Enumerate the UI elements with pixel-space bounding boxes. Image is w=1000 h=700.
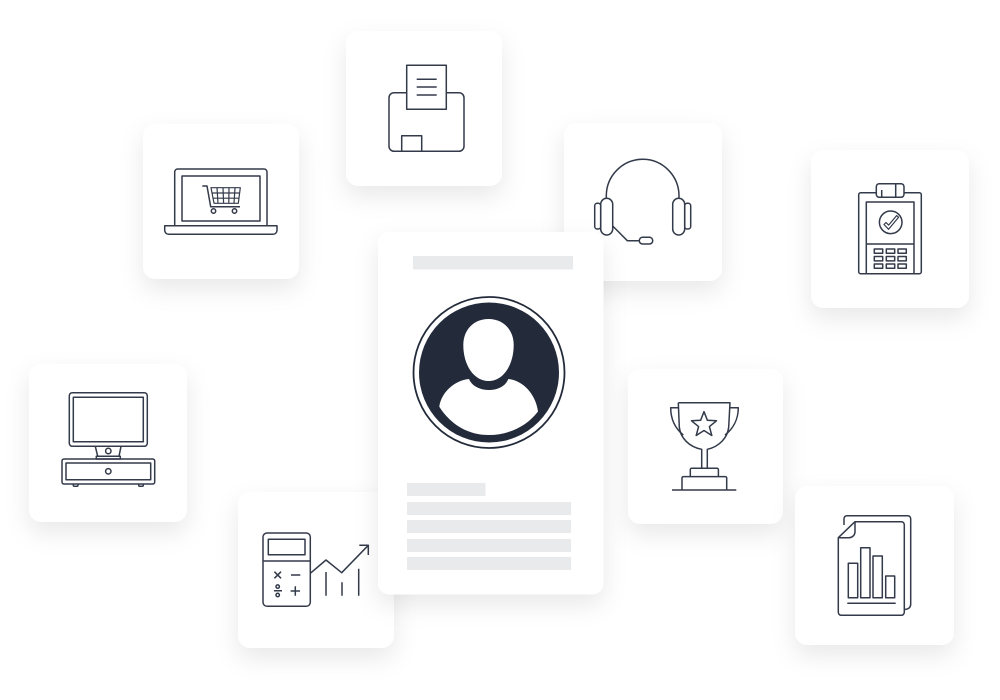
panel: laptop with shopping cart (143, 124, 299, 279)
icon: payment terminal with check mark (859, 184, 921, 274)
panel: profile document (378, 232, 604, 594)
document title placeholder (413, 256, 573, 270)
icon: laptop shopping cart (165, 169, 277, 234)
panel: headset (564, 123, 722, 281)
icon: calculator and growth chart (263, 533, 368, 606)
panel: report with bar chart (795, 486, 954, 645)
icon: headset (595, 159, 691, 244)
panel: calculator and growth chart (238, 492, 394, 648)
text placeholder lines (407, 483, 571, 570)
panel: payment terminal (811, 150, 969, 308)
panel: fax printer (346, 31, 502, 186)
panel: trophy (628, 369, 783, 524)
icon: point of sale computer (62, 393, 155, 486)
icon: fax printer (389, 65, 464, 151)
panel: point of sale computer (29, 364, 187, 522)
icon: report with bar chart (838, 516, 911, 615)
icon: trophy with star (671, 403, 738, 490)
avatar (414, 297, 564, 448)
